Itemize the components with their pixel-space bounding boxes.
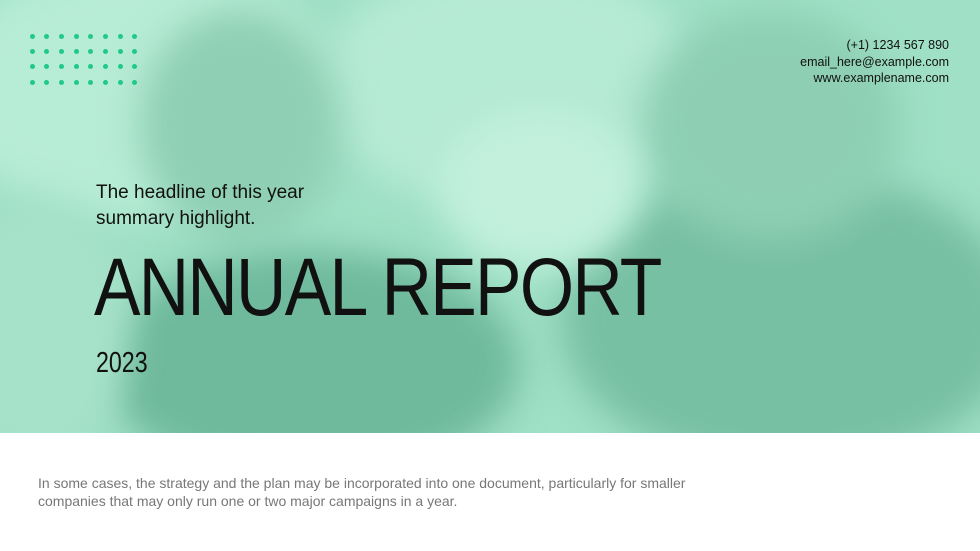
subheadline (96, 182, 304, 229)
contact info (800, 38, 949, 85)
contact info: email_here@example.com (800, 54, 949, 68)
hero photo background (0, 0, 980, 433)
description text: companies that may only run one or two major campaigns in a year. (38, 493, 457, 509)
description text: In some cases, the strategy and the plan may be incorporated into one document, particularly for smaller (38, 475, 685, 491)
subheadline: The headline of this year (96, 182, 304, 203)
year: 2023 (96, 347, 148, 379)
subheadline: summary highlight. (96, 208, 255, 229)
contact info: www.examplename.com (814, 71, 949, 85)
description text (38, 475, 686, 509)
contact info: (+1) 1234 567 890 (846, 38, 949, 52)
title: ANNUAL REPORT (94, 242, 661, 333)
decorative dot grid (30, 34, 137, 85)
